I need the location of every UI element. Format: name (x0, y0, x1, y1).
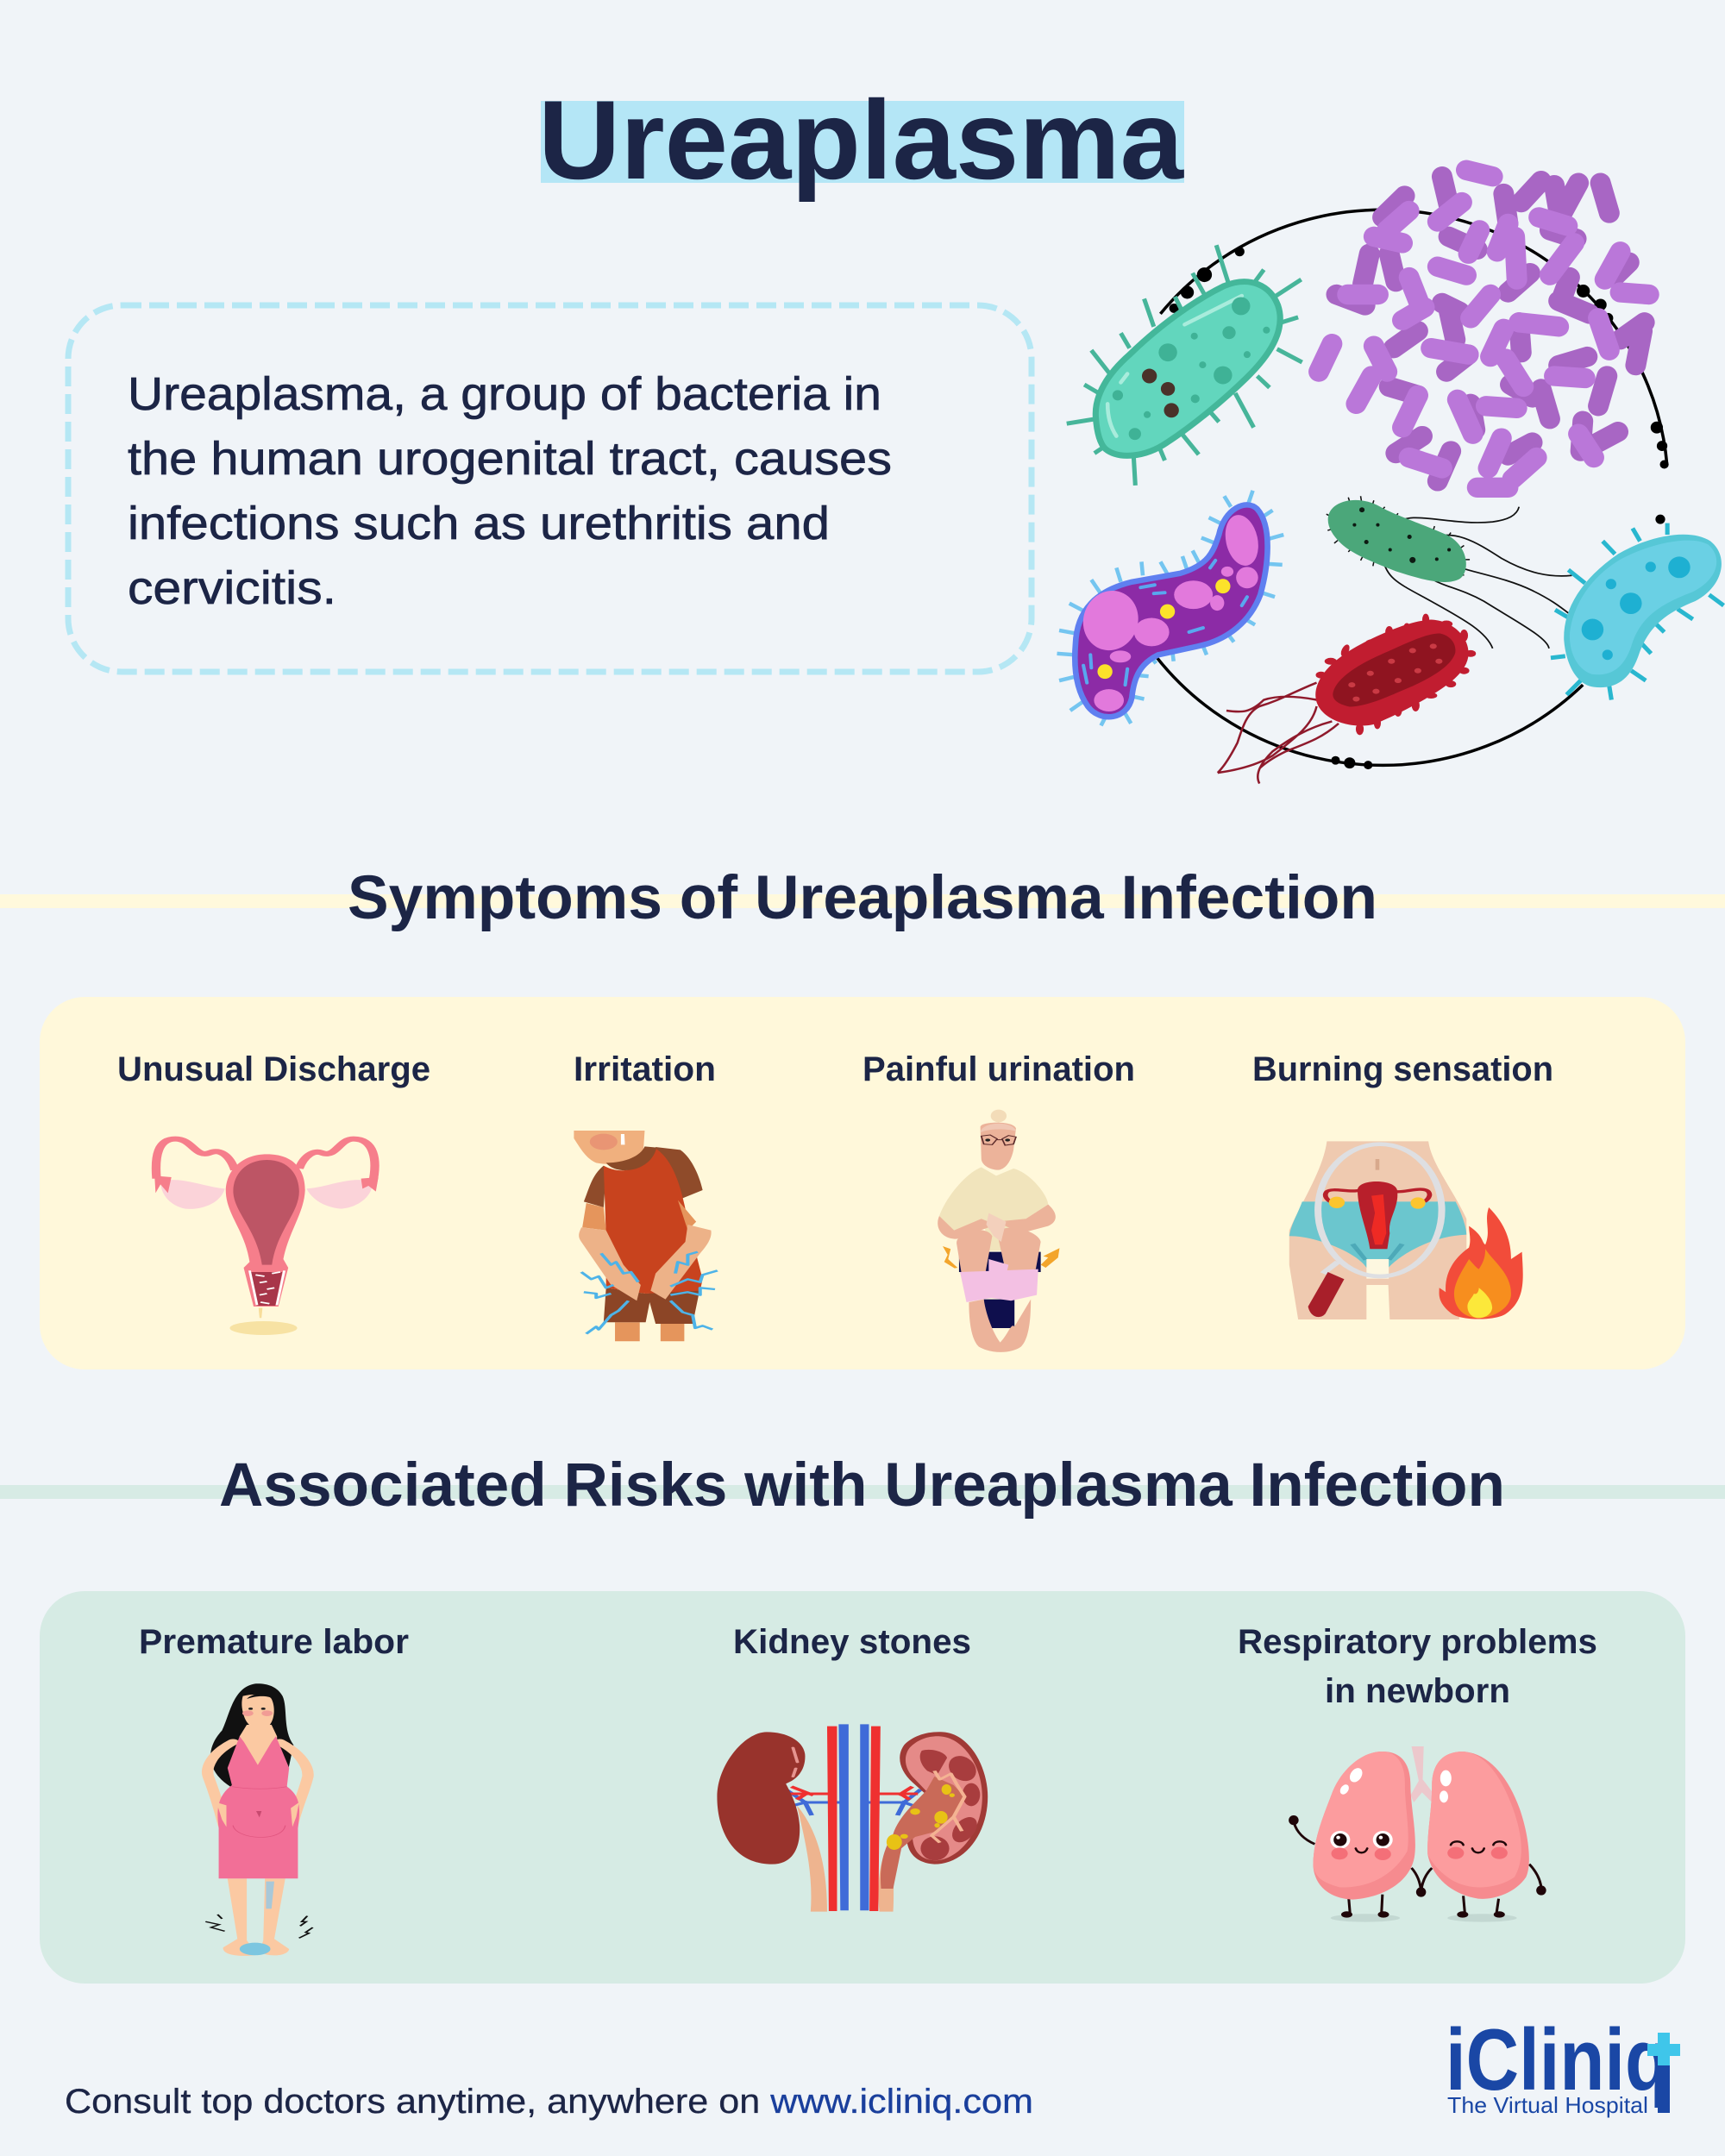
decorative band (0, 1485, 1725, 1499)
icon: smiling lungs (1289, 1746, 1546, 1922)
label: burning sensation: Burning sensation (1252, 1050, 1553, 1088)
icon: person with groin irritation (574, 1131, 718, 1341)
icon: plus (1647, 2033, 1680, 2065)
circle outline (1155, 210, 1669, 769)
icon: elderly person in pain (938, 1110, 1059, 1352)
text: definition (128, 368, 892, 614)
purple rod bacteria (1319, 170, 1649, 487)
logo: iCliniq: iCliniq (1446, 2012, 1670, 2109)
text: definition: infections such as urethritis and (128, 498, 830, 549)
logo: iCliniq: The Virtual Hospital (1447, 2092, 1648, 2118)
cyan bacterium (1551, 523, 1723, 700)
text: definition: Ureaplasma, a group of bacteria in (128, 368, 881, 420)
panel: definition callout (68, 305, 1032, 672)
footer text: Consult top doctors anytime, anywhere on www.icliniq.com (65, 2083, 1033, 2121)
illustration: bacteria cluster (1057, 170, 1723, 784)
decorative band (0, 894, 1725, 908)
panel: symptoms (40, 997, 1685, 1369)
label: irritation: Irritation (574, 1050, 716, 1088)
icon: uterus with discharge (154, 1139, 379, 1335)
icon: pregnant woman (205, 1683, 313, 1956)
text: definition: cervicitis. (128, 562, 336, 614)
label: premature labor: Premature labor (139, 1623, 409, 1661)
teal bacterium (1067, 245, 1302, 486)
text: definition: the human urogenital tract, causes (128, 433, 892, 485)
icon: kidneys with stones (717, 1724, 988, 1912)
label: respiratory problems in newborn: Respiratory problems (1238, 1623, 1597, 1661)
heading: symptoms: Symptoms of Ureaplasma Infection (348, 864, 1377, 932)
label: respiratory problems in newborn: in newborn (1325, 1672, 1510, 1710)
magenta bacterium (1057, 491, 1283, 725)
red bacterium (1218, 614, 1476, 784)
icon: burning sensation anatomy (1289, 1141, 1523, 1319)
heading: associated risks: Associated Risks with Ureaplasma Infection (219, 1451, 1505, 1520)
panel: risks (40, 1591, 1685, 1984)
label: respiratory problems in newborn (1238, 1623, 1597, 1710)
green flagellated bacterium (1327, 496, 1571, 649)
title: Ureaplasma (538, 77, 1185, 203)
label: painful urination: Painful urination (862, 1050, 1135, 1088)
label: kidney stones: Kidney stones (733, 1623, 971, 1661)
icon: flame (1440, 1207, 1523, 1319)
label: unusual discharge: Unusual Discharge (117, 1050, 430, 1088)
